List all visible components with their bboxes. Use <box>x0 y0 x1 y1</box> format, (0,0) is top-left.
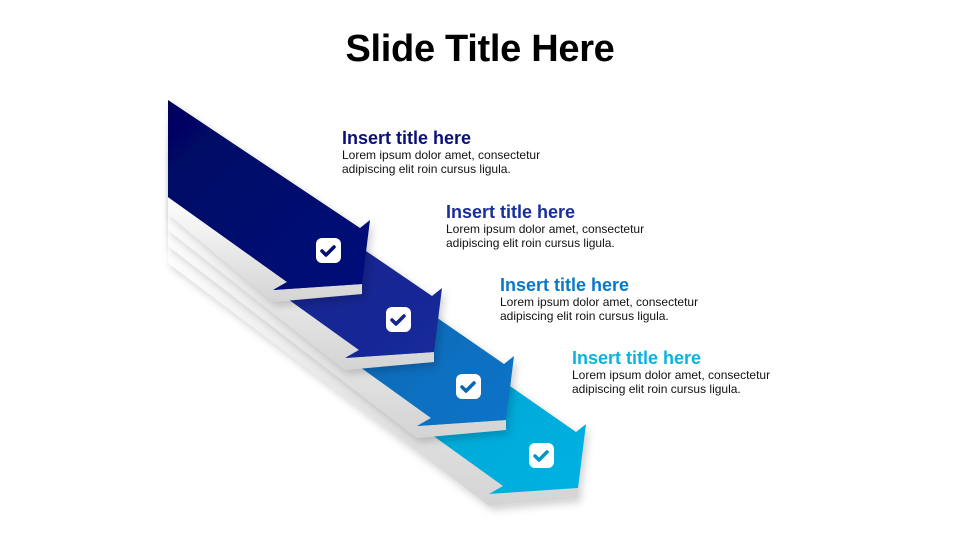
icon: check 3 <box>456 374 481 399</box>
text block 4 <box>572 348 770 396</box>
text block 2: Lorem ipsum dolor amet, consectetur <box>446 222 644 236</box>
text block 2: adipiscing elit roin cursus ligula. <box>446 236 615 250</box>
text block 2 <box>446 202 644 250</box>
text block 4: Insert title here <box>572 348 701 368</box>
text block 3: Lorem ipsum dolor amet, consectetur <box>500 295 698 309</box>
arrow 4 <box>168 148 586 506</box>
text block 2: Insert title here <box>446 202 575 222</box>
arrow 2 <box>168 116 442 370</box>
title: Slide Title Here <box>345 28 615 70</box>
icon: check 4 <box>529 443 554 468</box>
text block 3: adipiscing elit roin cursus ligula. <box>500 309 669 323</box>
icon: check 2 <box>386 307 411 332</box>
text block 1: Insert title here <box>342 128 471 148</box>
arrow 1 <box>168 100 370 302</box>
text block 1: adipiscing elit roin cursus ligula. <box>342 162 511 176</box>
text block 1 <box>342 128 540 176</box>
arrow 3 <box>168 132 514 438</box>
text block 3 <box>500 275 698 323</box>
text block 4: Lorem ipsum dolor amet, consectetur <box>572 368 770 382</box>
text block 4: adipiscing elit roin cursus ligula. <box>572 382 741 396</box>
text block 1: Lorem ipsum dolor amet, consectetur <box>342 148 540 162</box>
icon: check 1 <box>316 238 341 263</box>
text block 3: Insert title here <box>500 275 629 295</box>
